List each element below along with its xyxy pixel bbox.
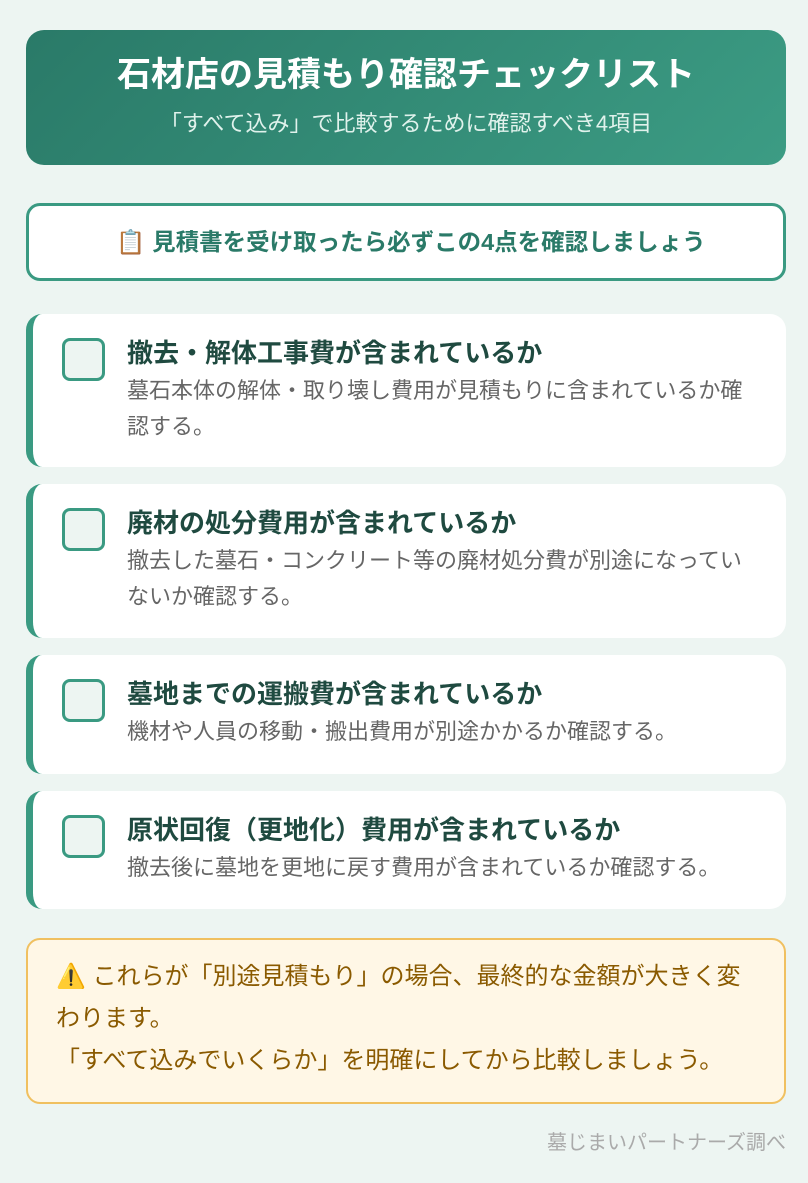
card description: 認する。 bbox=[127, 414, 215, 439]
card description bbox=[127, 378, 742, 439]
warning callout: わります。 bbox=[56, 1005, 174, 1032]
card title: 墓地までの運搬費が含まれているか bbox=[127, 679, 542, 709]
checkbox bbox=[62, 815, 105, 858]
card title: 撤去・解体工事費が含まれているか bbox=[127, 338, 542, 368]
card 3 bbox=[26, 655, 786, 774]
card description bbox=[127, 548, 742, 609]
subtitle: 「すべて込み」で比較するために確認すべき4項目 bbox=[160, 111, 652, 136]
card 2 bbox=[26, 484, 786, 638]
warning callout: ⚠️ これらが「別途見積もり」の場合、最終的な金額が大きく変 bbox=[56, 963, 741, 990]
card title: 廃材の処分費用が含まれているか bbox=[127, 508, 516, 538]
footer source: 墓じまいパートナーズ調べ bbox=[547, 1132, 786, 1154]
intro banner bbox=[26, 203, 786, 281]
warning callout bbox=[26, 938, 786, 1104]
card 4 bbox=[26, 791, 786, 909]
card 1 bbox=[26, 314, 786, 467]
card description: 撤去した墓石・コンクリート等の廃材処分費が別途になってい bbox=[127, 548, 742, 573]
card description: 墓石本体の解体・取り壊し費用が見積もりに含まれているか確 bbox=[127, 378, 742, 403]
card description: 機材や人員の移動・搬出費用が別途かかるか確認する。 bbox=[127, 719, 677, 744]
card description: ないか確認する。 bbox=[127, 584, 303, 609]
card description: 撤去後に墓地を更地に戻す費用が含まれているか確認する。 bbox=[127, 855, 720, 880]
warning callout: 「すべて込みでいくらか」を明確にしてから比較しましょう。 bbox=[56, 1047, 723, 1074]
checkbox bbox=[62, 508, 105, 551]
header bbox=[26, 30, 786, 165]
intro banner: 📋 見積書を受け取ったら必ずこの4点を確認しましょう bbox=[116, 229, 706, 255]
card title: 原状回復（更地化）費用が含まれているか bbox=[127, 815, 620, 845]
title: 石材店の見積もり確認チェックリスト bbox=[117, 56, 695, 94]
checkbox bbox=[62, 679, 105, 722]
checkbox bbox=[62, 338, 105, 381]
